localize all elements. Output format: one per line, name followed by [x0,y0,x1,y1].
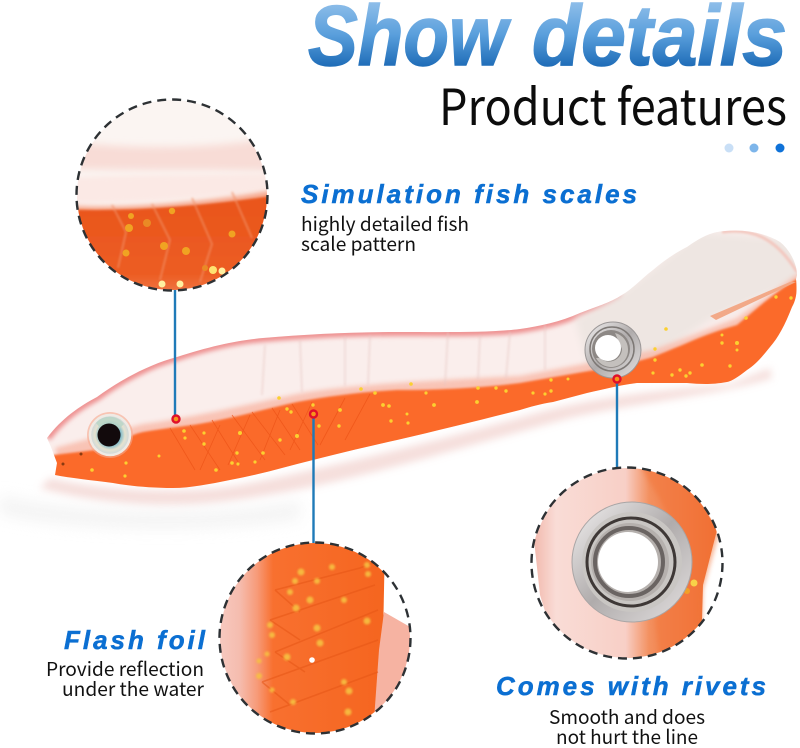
heading: Simulation fish scales: Simulation fish scales [301,179,637,209]
callout 2 connector [310,410,317,543]
nose specks [62,452,82,466]
lure rivet [585,322,641,378]
glitter [90,295,793,478]
text: rivets description: Smooth and does [549,703,705,730]
fish shadow [0,368,772,529]
lure top edge tint [47,295,622,438]
text: fish scale description: scale pattern [301,230,416,257]
rivet close-up [572,502,692,622]
callout 3 connector [614,376,620,468]
lure pink fade above belly [55,272,800,470]
lure orange belly [45,277,800,500]
lure eye [87,412,133,458]
panel: rivet detail circle [532,465,722,665]
panel: fish scales detail circle [75,98,269,292]
text: fish scale description: highly detailed fish [301,210,469,237]
text: flash foil description: under the water [62,675,205,702]
heading: Flash foil: Flash foil [64,625,206,655]
lure tail shading [572,235,795,352]
text: flash foil description: Provide reflection [46,655,204,682]
panel: flash foil detail circle [210,540,412,740]
lure scale pattern [170,394,370,470]
progress dots [724,144,784,152]
heading: Comes with rivets: Comes with rivets [496,671,766,701]
lure body [40,220,800,500]
callout 1 connector [172,290,180,422]
lure notch [710,282,796,320]
lure body ribs [262,325,545,395]
